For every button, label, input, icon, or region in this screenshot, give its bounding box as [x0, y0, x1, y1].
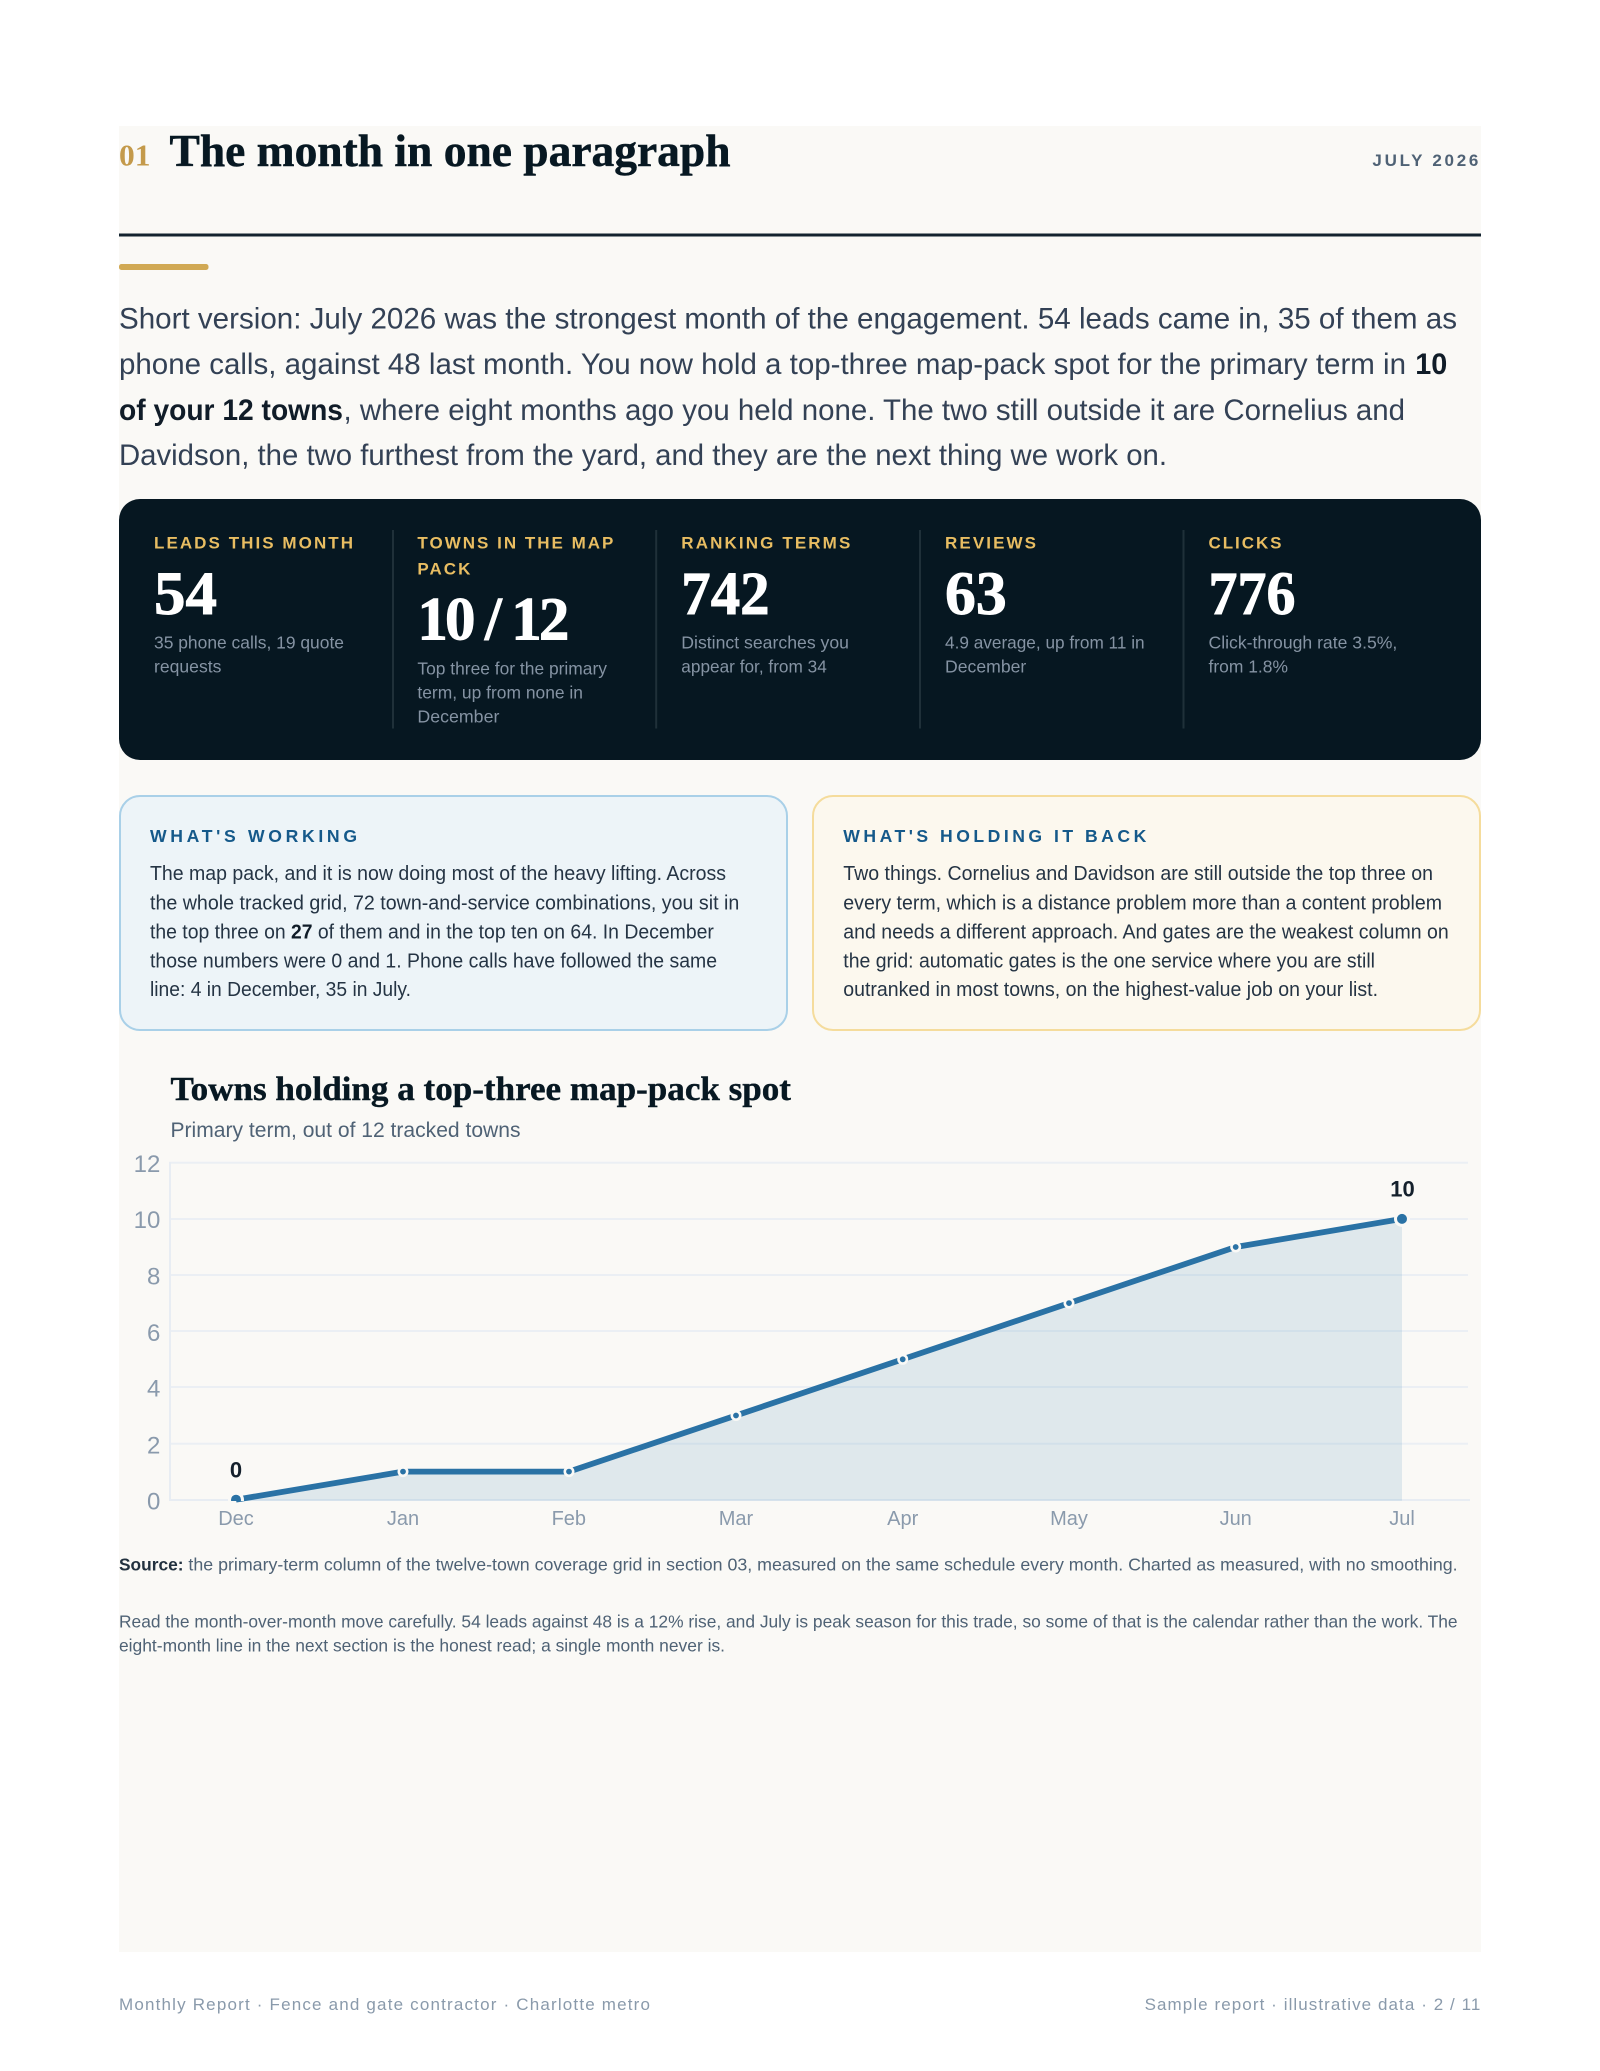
trend line	[236, 1219, 1402, 1500]
section number: 01	[119, 138, 150, 173]
x axis labels: Dec	[218, 1508, 254, 1530]
lead paragraph: Davidson, the two furthest from the yard, and they are the next thing we work on.	[119, 439, 1167, 472]
KPI: leads	[154, 533, 353, 676]
title: The month in one paragraph	[170, 125, 730, 176]
lead paragraph: phone calls, against 48 last month. You now hold a top-three map-pack spot for the primary term in	[119, 348, 1406, 381]
panel: what's holding it back	[813, 796, 1480, 1030]
x axis labels: Jun	[1220, 1508, 1252, 1530]
line chart: towns in top three by month	[134, 1151, 1470, 1530]
y axis labels: 12	[134, 1151, 160, 1178]
x axis labels: Feb	[552, 1508, 586, 1530]
page panel background	[119, 126, 1481, 1952]
footer left: Monthly Report · Fence and gate contractor · Charlotte metro	[119, 1995, 650, 2014]
x axis labels: May	[1050, 1508, 1088, 1530]
KPI: towns in the map pack: Top three for the primary	[417, 658, 607, 678]
KPI: clicks: 776	[1208, 561, 1296, 628]
report page	[119, 126, 1481, 2014]
KPI: leads: requests	[154, 656, 222, 676]
body text: of them and in the top ten on 64. In December	[318, 921, 714, 943]
x axis labels: Jul	[1389, 1508, 1415, 1530]
y axis labels: 0	[147, 1488, 160, 1515]
body text	[150, 863, 739, 1001]
KPI: reviews	[945, 533, 1145, 676]
KPI: ranking terms: RANKING TERMS	[681, 533, 850, 552]
data points	[230, 1212, 1408, 1506]
area fill	[236, 1219, 1402, 1501]
y axis labels: 10	[134, 1207, 160, 1234]
KPI: ranking terms	[681, 533, 850, 676]
lead paragraph: , where eight months ago you held none. The two still outside it are Cornelius and	[344, 394, 1405, 427]
lead paragraph	[119, 303, 1457, 472]
KPI: leads: 54	[154, 561, 217, 628]
body text: every term, which is a distance problem more than a content problem	[843, 892, 1442, 914]
source note: Source:	[119, 1555, 184, 1575]
y axis labels	[134, 1151, 160, 1515]
x axis labels	[218, 1508, 1415, 1530]
KPI: ranking terms: appear for, from 34	[681, 656, 827, 676]
source note: the primary-term column of the twelve-town coverage grid in section 03, measured on the same schedule every month. Charted as measured, with no smoothing.	[188, 1555, 1458, 1575]
KPI: towns in the map pack: PACK	[417, 559, 471, 578]
section header	[119, 125, 1478, 176]
KPI: reviews: REVIEWS	[945, 533, 1036, 552]
KPI: clicks: Click-through rate 3.5%,	[1208, 632, 1397, 652]
footer right: Sample report · illustrative data · 2 / 11	[1145, 1995, 1480, 2014]
body text: 27	[291, 921, 312, 943]
KPI: leads: 35 phone calls, 19 quote	[154, 632, 344, 652]
body text: the whole tracked grid, 72 town-and-service combinations, you sit in	[150, 892, 739, 914]
KPI: towns in the map pack	[417, 533, 613, 726]
gold accent bar	[119, 264, 208, 270]
body text: the grid: automatic gates is the one service where you are still	[843, 950, 1375, 972]
x axis labels: Jan	[387, 1508, 419, 1530]
panel: KPI strip	[119, 499, 1481, 760]
KPI: towns in the map pack: December	[417, 706, 500, 726]
body text: Two things. Cornelius and Davidson are still outside the top three on	[843, 863, 1433, 885]
KPI: clicks	[1208, 533, 1397, 676]
y axis labels: 8	[147, 1263, 160, 1290]
y axis labels: 4	[147, 1376, 160, 1403]
data label: December: 0	[230, 1457, 242, 1482]
y axis labels: 6	[147, 1320, 160, 1347]
KPI: reviews: 63	[945, 561, 1007, 628]
KPI: clicks: from 1.8%	[1208, 656, 1288, 676]
body text: line: 4 in December, 35 in July.	[150, 979, 411, 1001]
lead paragraph: 10	[1415, 348, 1447, 381]
body text: those numbers were 0 and 1. Phone calls have followed the same	[150, 950, 717, 972]
heading: WHAT'S WORKING	[150, 826, 357, 846]
KPI: towns in the map pack: TOWNS IN THE MAP	[417, 533, 613, 552]
caveat paragraph	[119, 1612, 1458, 1656]
lead paragraph: of your 12 towns	[119, 394, 343, 427]
heading: WHAT'S HOLDING IT BACK	[843, 826, 1147, 846]
caveat paragraph: eight-month line in the next section is the honest read; a single month never is.	[119, 1636, 725, 1656]
lead paragraph: Short version: July 2026 was the strongest month of the engagement. 54 leads came in, 35 of them as	[119, 303, 1457, 336]
KPI: reviews: 4.9 average, up from 11 in	[945, 632, 1145, 652]
body text: outranked in most towns, on the highest-value job on your list.	[843, 979, 1378, 1001]
panel: what's working	[120, 796, 787, 1030]
header rule	[119, 234, 1481, 236]
KPI: towns in the map pack: term, up from none in	[417, 682, 583, 702]
chart subtitle: Primary term, out of 12 tracked towns	[170, 1118, 520, 1142]
x axis labels: Apr	[887, 1508, 919, 1530]
KPI: reviews: December	[945, 656, 1026, 676]
KPI: ranking terms: Distinct searches you	[681, 632, 849, 652]
KPI: leads: LEADS THIS MONTH	[154, 533, 353, 552]
KPI: towns in the map pack: 10 / 12	[417, 586, 569, 653]
date label: JULY 2026	[1372, 151, 1478, 170]
KPI: clicks: CLICKS	[1208, 533, 1282, 552]
data label: July: 10	[1390, 1177, 1415, 1202]
body text: and needs a different approach. And gates are the weakest column on	[843, 921, 1449, 943]
body text: The map pack, and it is now doing most of the heavy lifting. Across	[150, 863, 726, 885]
y axis labels: 2	[147, 1433, 160, 1460]
body text: the top three on	[150, 921, 286, 943]
chart title: Towns holding a top-three map-pack spot	[170, 1071, 792, 1108]
grid lines	[169, 1162, 1470, 1501]
caveat paragraph: Read the month-over-month move carefully. 54 leads against 48 is a 12% rise, and July is peak season for this trade, so some of that is the calendar rather than the work. The	[119, 1612, 1458, 1632]
x axis labels: Mar	[719, 1508, 754, 1530]
body text	[843, 863, 1449, 1001]
KPI: ranking terms: 742	[681, 561, 770, 628]
